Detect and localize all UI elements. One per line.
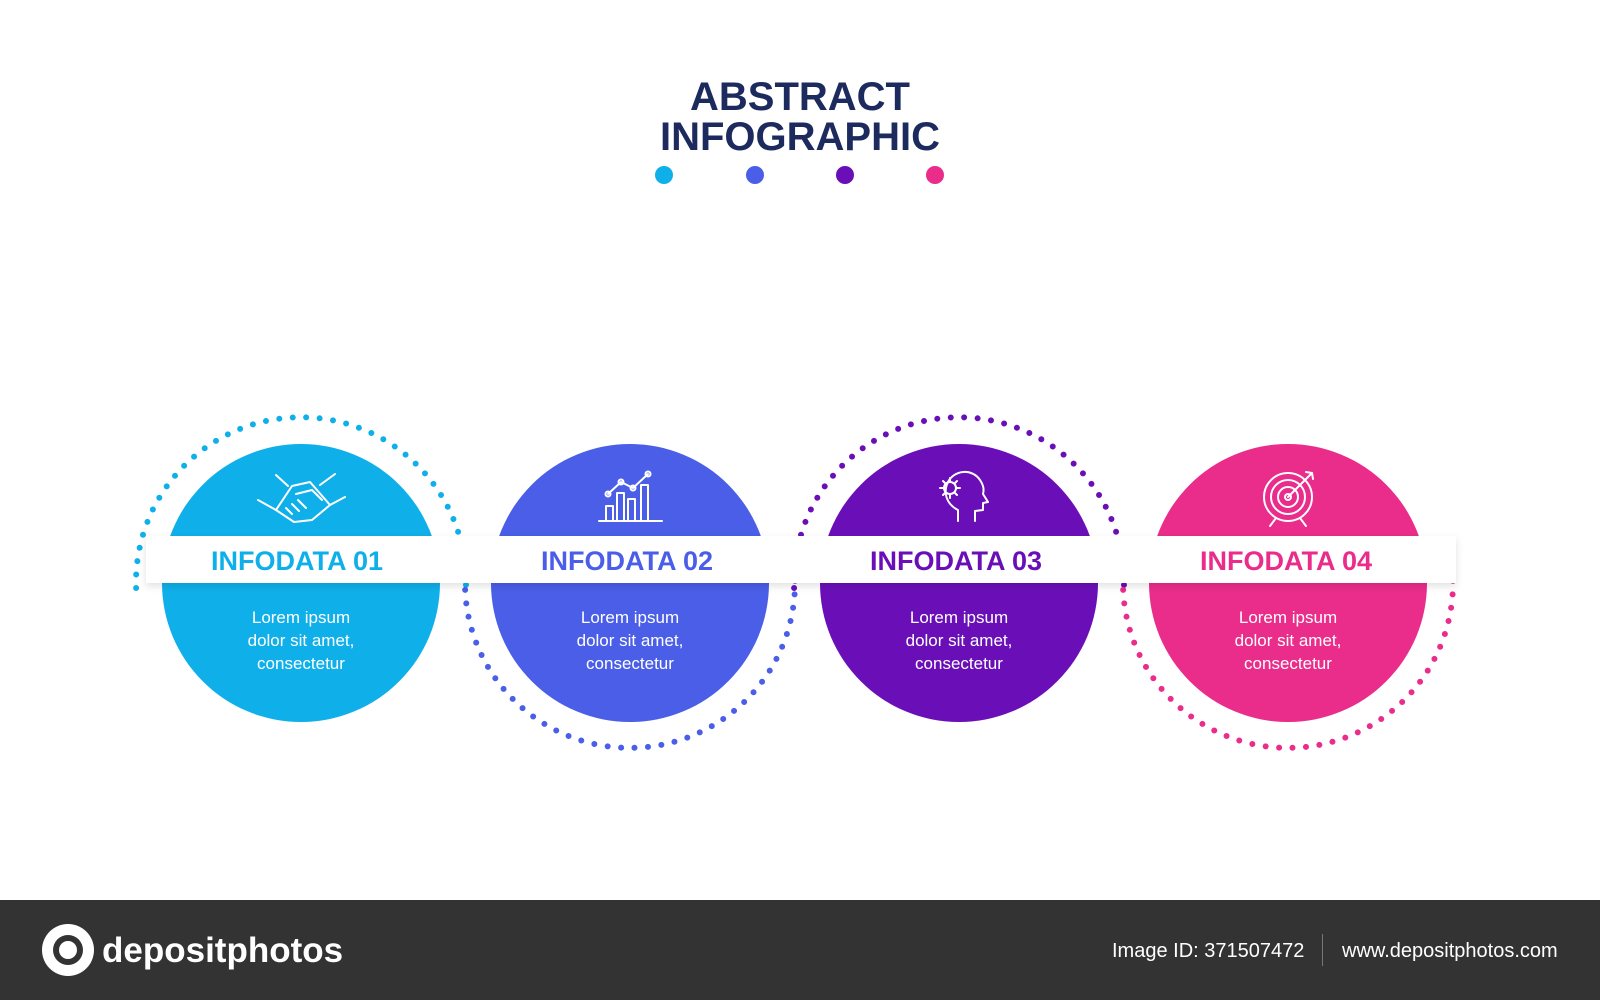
icon: target — [1264, 472, 1313, 526]
title dots — [655, 166, 944, 184]
body texts: dolor sit amet, — [906, 631, 1012, 650]
footer info — [1112, 934, 1558, 966]
body texts: dolor sit amet, — [1235, 631, 1341, 650]
icon: head with gear — [940, 472, 988, 521]
body texts: consectetur — [257, 654, 345, 673]
footer logo: depositphotos — [102, 931, 343, 970]
dotted rings — [136, 417, 1453, 748]
labels: INFODATA 01 — [211, 546, 383, 576]
icon: handshake — [258, 474, 345, 522]
labels: INFODATA 03 — [870, 546, 1042, 576]
footer logo — [42, 924, 343, 976]
body texts: consectetur — [1244, 654, 1332, 673]
body texts: dolor sit amet, — [248, 631, 354, 650]
labels — [211, 546, 1372, 576]
title: INFOGRAPHIC — [660, 115, 940, 159]
body texts: Lorem ipsum — [252, 608, 350, 627]
body texts: consectetur — [586, 654, 674, 673]
labels: INFODATA 02 — [541, 546, 713, 576]
title: ABSTRACT — [690, 75, 910, 119]
body texts — [248, 608, 1341, 673]
body texts: dolor sit amet, — [577, 631, 683, 650]
icon: bar chart — [599, 472, 662, 521]
circles — [162, 444, 1427, 722]
white band — [146, 536, 1456, 583]
body texts: Lorem ipsum — [1239, 608, 1337, 627]
labels: INFODATA 04 — [1200, 546, 1372, 576]
body texts: consectetur — [915, 654, 1003, 673]
body texts: Lorem ipsum — [581, 608, 679, 627]
footer — [0, 900, 1600, 1000]
footer info: Image ID: 371507472 — [1112, 940, 1304, 962]
body texts: Lorem ipsum — [910, 608, 1008, 627]
title — [660, 75, 940, 159]
footer info: www.depositphotos.com — [1341, 940, 1558, 962]
